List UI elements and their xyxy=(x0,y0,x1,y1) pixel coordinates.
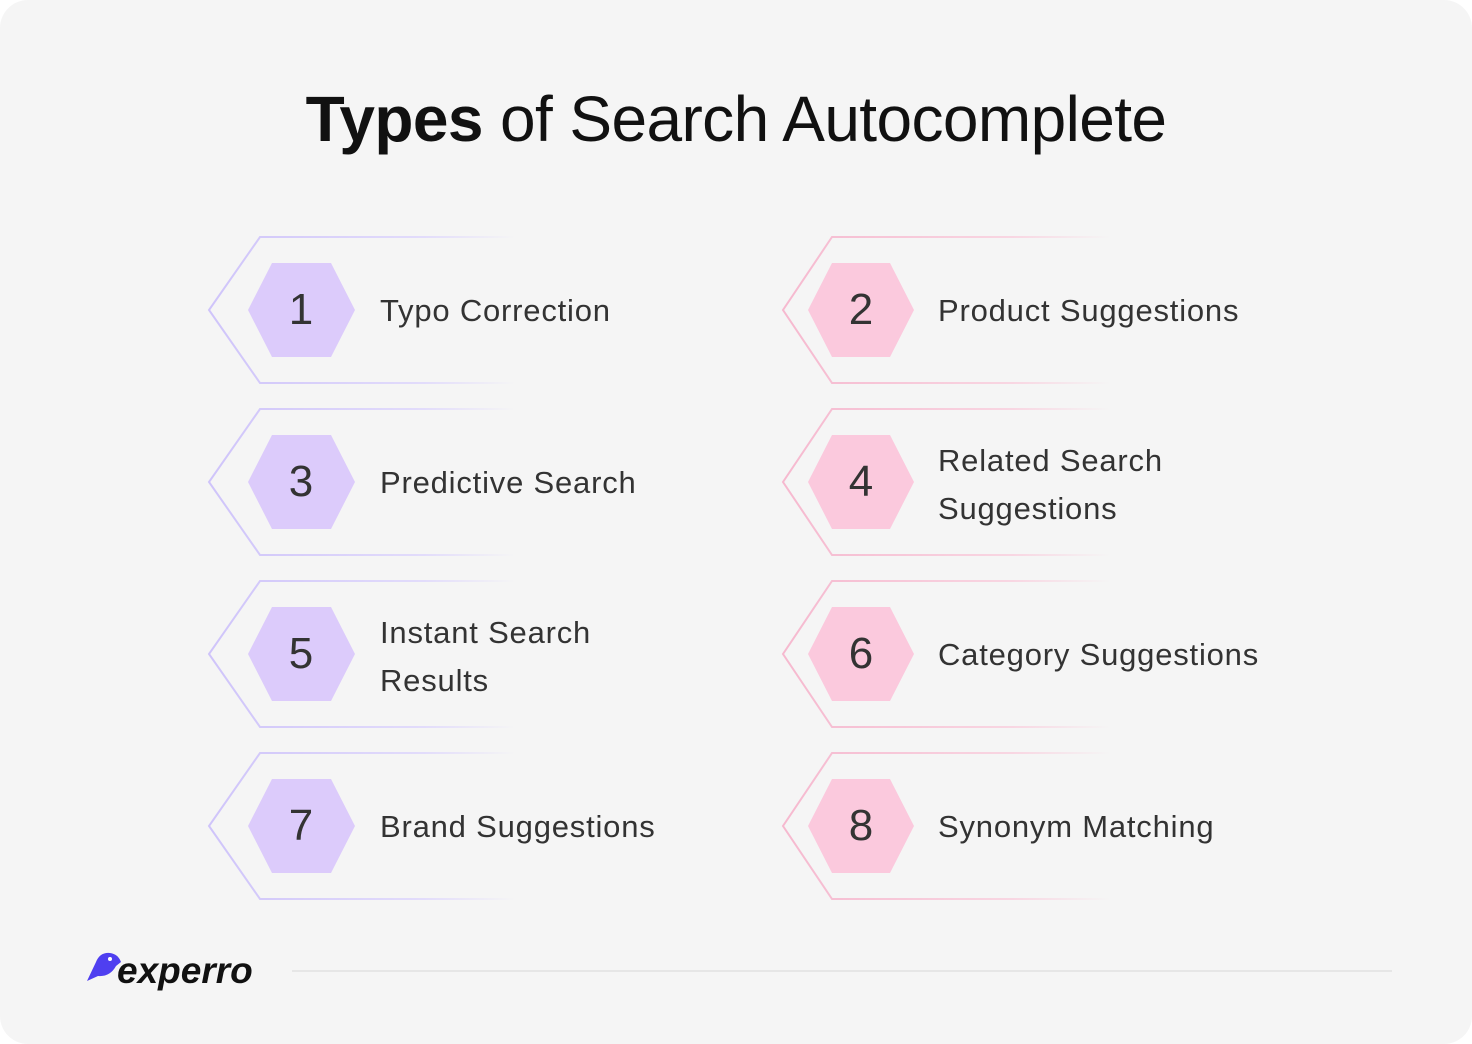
row 1 right xyxy=(783,237,1110,383)
text: Synonym Matching xyxy=(938,809,1214,844)
icon: bird logo xyxy=(87,953,121,981)
row 2 left xyxy=(209,409,515,555)
text: 2 xyxy=(849,285,873,334)
row 4 right xyxy=(783,753,1110,899)
text: Category Suggestions xyxy=(938,637,1259,672)
text: Related Search xyxy=(938,443,1163,478)
text: Predictive Search xyxy=(380,465,637,500)
logo text: experro xyxy=(117,950,253,991)
row 2 right xyxy=(783,409,1110,555)
text: 5 xyxy=(289,629,313,678)
row 3 right xyxy=(783,581,1110,727)
text: Results xyxy=(380,663,489,698)
text: 3 xyxy=(289,457,313,506)
title: Types of Search Autocomplete xyxy=(306,83,1166,155)
text: 4 xyxy=(849,457,873,506)
row 4 left xyxy=(209,753,515,899)
text: Typo Correction xyxy=(380,293,611,328)
labels xyxy=(380,293,1259,844)
text: 8 xyxy=(849,801,873,850)
text: Brand Suggestions xyxy=(380,809,656,844)
text: Suggestions xyxy=(938,491,1117,526)
numbers xyxy=(289,285,873,850)
row 3 left xyxy=(209,581,515,727)
text: Instant Search xyxy=(380,615,591,650)
text: 1 xyxy=(289,285,313,334)
text: Product Suggestions xyxy=(938,293,1239,328)
text: 7 xyxy=(289,801,313,850)
row 1 left xyxy=(209,237,515,383)
text: 6 xyxy=(849,629,873,678)
